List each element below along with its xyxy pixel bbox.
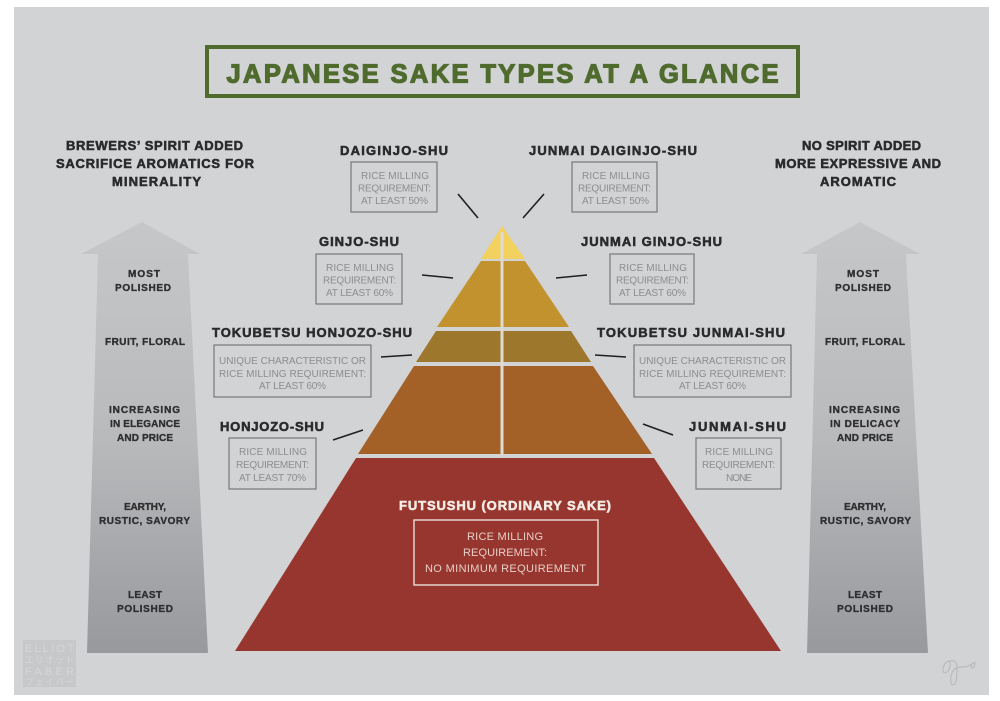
- label: tokubetsu honjozo-shu: UNIQUE CHARACTERISTIC OR: [219, 356, 366, 367]
- label: tokubetsu honjozo-shu: AT LEAST 60%: [259, 381, 326, 392]
- left arrow: POLISHED: [117, 604, 173, 615]
- label: junmai-shu: NONE: [726, 473, 752, 484]
- right column heading: MORE EXPRESSIVE AND: [775, 156, 941, 171]
- right arrow: POLISHED: [835, 283, 891, 294]
- left arrow: EARTHY,: [124, 502, 166, 513]
- label: junmai daiginjo-shu: RICE MILLING: [582, 171, 650, 182]
- left arrow: RUSTIC, SAVORY: [99, 516, 190, 527]
- label: junmai-shu: [643, 419, 786, 489]
- signature: [943, 660, 978, 685]
- tier: honjozo brown: [358, 366, 652, 454]
- label: ginjo-shu: RICE MILLING: [326, 263, 394, 274]
- label: ginjo-shu: GINJO-SHU: [319, 234, 399, 249]
- label: junmai-shu: REQUIREMENT:: [702, 460, 775, 471]
- label: tokubetsu junmai-shu: RICE MILLING REQUIREMENT:: [639, 369, 786, 380]
- right arrow: RUSTIC, SAVORY: [820, 516, 911, 527]
- label: honjozo-shu: [220, 419, 363, 489]
- label: junmai daiginjo-shu: [523, 143, 697, 218]
- right column heading: NO SPIRIT ADDED: [802, 138, 921, 153]
- left arrow: IN ELEGANCE: [110, 419, 180, 430]
- tier: tokubetsu dark gold: [416, 331, 591, 362]
- left arrow: INCREASING: [109, 405, 180, 416]
- label: junmai ginjo-shu: AT LEAST 60%: [619, 288, 686, 299]
- futsushu label: FUTSUSHU (ORDINARY SAKE): [399, 498, 611, 513]
- right arrow: POLISHED: [837, 604, 893, 615]
- futsushu label: NO MINIMUM REQUIREMENT: [425, 563, 586, 575]
- label: honjozo-shu: RICE MILLING: [239, 447, 307, 458]
- left arrow: POLISHED: [115, 283, 171, 294]
- logo: Elliot Faber stamp: ELLIOT: [25, 643, 74, 655]
- futsushu label: RICE MILLING: [467, 531, 543, 543]
- left column heading: [56, 138, 255, 189]
- label: ginjo-shu: AT LEAST 60%: [326, 288, 393, 299]
- label: junmai-shu: RICE MILLING: [705, 447, 773, 458]
- left arrow: AND PRICE: [117, 433, 173, 444]
- label: daiginjo-shu: AT LEAST 50%: [361, 196, 428, 207]
- label: daiginjo-shu: REQUIREMENT:: [358, 184, 431, 194]
- label: tokubetsu junmai-shu: AT LEAST 60%: [679, 381, 746, 392]
- left column heading: BREWERS’ SPIRIT ADDED: [66, 138, 243, 153]
- tier: ginjo gold: [437, 261, 569, 327]
- title: JAPANESE SAKE TYPES AT A GLANCE: [226, 60, 778, 88]
- label: junmai ginjo-shu: REQUIREMENT:: [616, 276, 689, 286]
- right arrow: FRUIT, FLORAL: [825, 337, 905, 348]
- logo: Elliot Faber stamp: FABER: [25, 666, 74, 678]
- left column heading: SACRIFICE AROMATICS FOR: [56, 156, 255, 171]
- right column heading: [775, 138, 941, 189]
- left arrow: FRUIT, FLORAL: [105, 337, 185, 348]
- futsushu label: REQUIREMENT:: [463, 547, 547, 559]
- futsushu label: [399, 498, 611, 585]
- right arrow: IN DELICACY: [830, 419, 900, 430]
- logo: Elliot Faber stamp: [23, 640, 76, 687]
- right arrow: MOST: [847, 269, 879, 280]
- label: daiginjo-shu: RICE MILLING: [361, 171, 429, 182]
- logo: Elliot Faber stamp: フェイバー: [25, 677, 74, 687]
- right arrow: [801, 222, 928, 653]
- left arrow: MOST: [128, 269, 160, 280]
- label: junmai-shu: JUNMAI-SHU: [689, 419, 786, 434]
- right column heading: AROMATIC: [820, 174, 897, 189]
- title: [207, 47, 798, 96]
- left arrow: [81, 222, 208, 653]
- label: junmai ginjo-shu: [556, 234, 722, 304]
- label: tokubetsu junmai-shu: [595, 325, 791, 397]
- label: junmai ginjo-shu: JUNMAI GINJO-SHU: [581, 234, 722, 249]
- label: honjozo-shu: HONJOZO-SHU: [220, 419, 324, 434]
- right arrow: LEAST: [848, 590, 882, 601]
- tier: futsushu red: [235, 458, 781, 651]
- label: daiginjo-shu: [340, 143, 478, 218]
- tier: yellow top: [481, 226, 525, 259]
- left column heading: MINERALITY: [112, 174, 201, 189]
- label: daiginjo-shu: DAIGINJO-SHU: [340, 143, 448, 158]
- right arrow: AND PRICE: [837, 433, 893, 444]
- label: honjozo-shu: AT LEAST 70%: [239, 473, 306, 484]
- label: tokubetsu junmai-shu: TOKUBETSU JUNMAI-SHU: [597, 325, 785, 340]
- right arrow: EARTHY,: [844, 502, 886, 513]
- label: junmai daiginjo-shu: JUNMAI DAIGINJO-SHU: [529, 143, 697, 158]
- pyramid: [235, 226, 781, 651]
- label: junmai ginjo-shu: RICE MILLING: [619, 263, 687, 274]
- right arrow: INCREASING: [829, 405, 900, 416]
- label: ginjo-shu: REQUIREMENT:: [323, 276, 396, 286]
- left arrow: LEAST: [128, 590, 162, 601]
- label: honjozo-shu: REQUIREMENT:: [236, 460, 309, 471]
- label: ginjo-shu: [316, 234, 453, 304]
- label: tokubetsu honjozo-shu: TOKUBETSU HONJOZO-SHU: [212, 325, 412, 340]
- label: tokubetsu junmai-shu: UNIQUE CHARACTERISTIC OR: [639, 356, 786, 367]
- logo: Elliot Faber stamp: エリオット: [25, 655, 74, 665]
- label: junmai daiginjo-shu: AT LEAST 50%: [582, 196, 649, 207]
- pyramid centre divider: [500, 232, 504, 455]
- label: tokubetsu honjozo-shu: [212, 325, 412, 397]
- label: junmai daiginjo-shu: REQUIREMENT:: [578, 184, 651, 194]
- label: tokubetsu honjozo-shu: RICE MILLING REQUIREMENT:: [219, 369, 366, 380]
